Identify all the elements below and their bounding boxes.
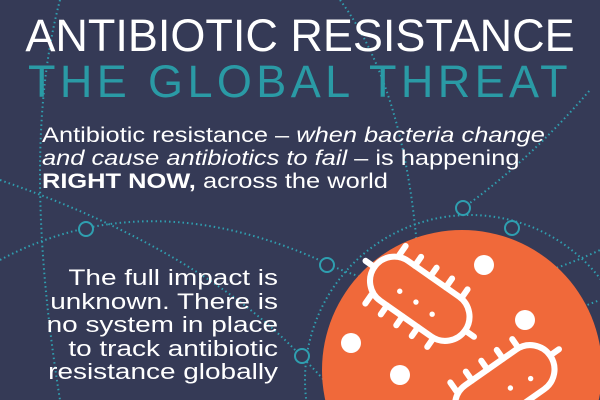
icon: bacteria circle <box>322 230 600 400</box>
title: ANTIBIOTIC RESISTANCE <box>25 10 575 61</box>
impact text: The full impact is <box>68 265 278 290</box>
intro text: and cause antibiotics to fail – is happening <box>42 147 519 170</box>
impact text: to track antibiotic <box>68 336 278 360</box>
title: THE GLOBAL THREAT <box>28 56 572 107</box>
intro text: Antibiotic resistance – when bacteria change <box>42 124 545 147</box>
impact text <box>47 265 278 384</box>
intro text: RIGHT NOW, across the world <box>42 170 388 193</box>
title <box>25 10 575 107</box>
intro text <box>42 124 545 193</box>
impact text: unknown. There is <box>50 288 278 314</box>
impact text: resistance globally <box>48 359 278 384</box>
impact text: no system in place <box>47 312 278 337</box>
